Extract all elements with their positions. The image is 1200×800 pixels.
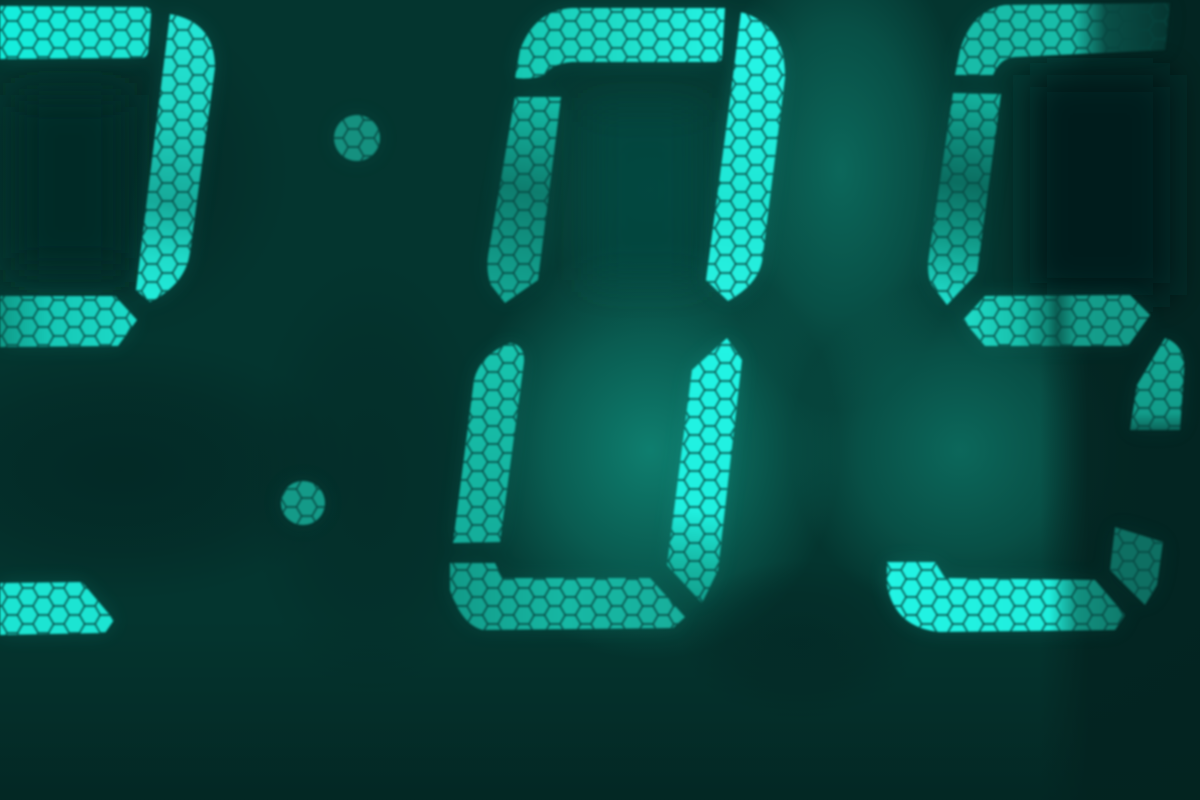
dot: lower xyxy=(281,481,325,525)
segment: bottom xyxy=(887,562,1125,632)
segment: top xyxy=(515,8,725,79)
dot: upper xyxy=(334,115,380,161)
segment: bottom xyxy=(450,563,685,630)
digit 2 xyxy=(450,8,785,630)
segment: upper right xyxy=(136,14,215,302)
segment: middle xyxy=(963,295,1150,346)
segment: upper left xyxy=(928,93,1001,305)
segment: upper left xyxy=(487,97,561,303)
segment: upper right xyxy=(706,12,785,301)
segment: lower right xyxy=(667,338,742,603)
colon dots xyxy=(281,115,380,525)
segment: right, lower part shadowed xyxy=(1110,527,1163,605)
segment: lower left xyxy=(453,343,524,543)
segment: right, lower half upper part xyxy=(1130,338,1184,430)
segment: middle xyxy=(0,296,137,347)
digit 3 xyxy=(887,3,1184,632)
segment: top xyxy=(955,3,1170,75)
segment: top xyxy=(0,6,151,59)
digit 1 (partial) xyxy=(0,6,215,635)
segment: bottom xyxy=(0,582,114,635)
